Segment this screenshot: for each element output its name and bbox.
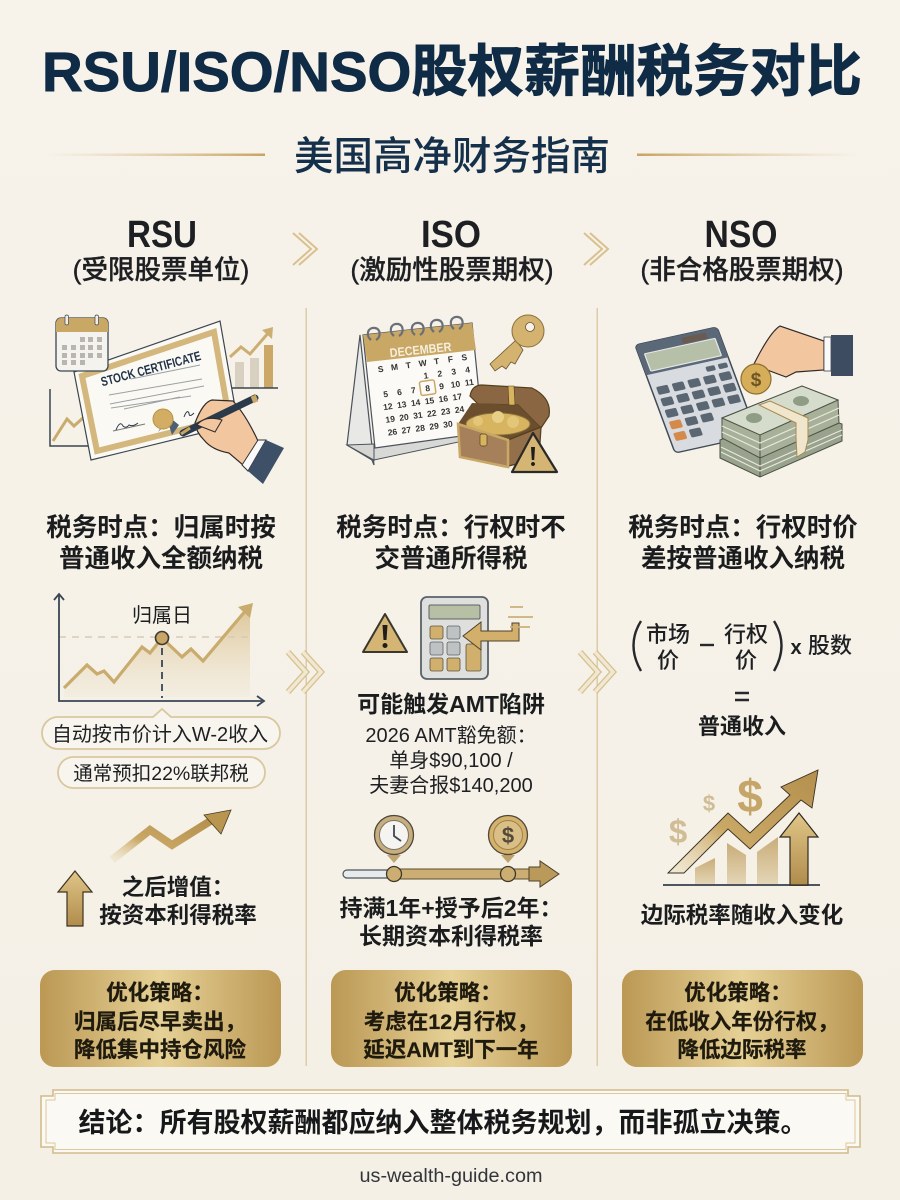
calendar dates: T xyxy=(433,356,441,366)
strategy box: NSO: 优化策略： xyxy=(684,981,792,1005)
desk calendar xyxy=(347,317,484,465)
calendar dates: 9 xyxy=(439,381,445,391)
strategy box: ISO xyxy=(331,970,572,1067)
column heading: ISO xyxy=(350,214,554,285)
title: RSU/ISO/NSO股权薪酬税务对比 xyxy=(42,40,862,103)
note: long-term capital gains: 长期资本利得税率 xyxy=(359,923,543,949)
pin: clock xyxy=(374,816,414,863)
calendar dates: 30 xyxy=(443,419,454,430)
strategy box: NSO: 降低边际税率 xyxy=(677,1038,807,1062)
pin: dollar: $ xyxy=(502,823,514,848)
calendar dates: W xyxy=(418,357,428,369)
calendar dates: 26 xyxy=(387,426,398,438)
chart icon: rising marginal rate xyxy=(663,770,820,885)
calendar dates: 11 xyxy=(464,377,475,388)
calendar dates: 24 xyxy=(454,404,465,415)
column heading: RSU xyxy=(73,214,249,285)
formula: spread = ordinary income: 普通收入 xyxy=(698,714,786,739)
calendar dates: 7 xyxy=(410,385,417,395)
tax timing: RSU xyxy=(46,514,276,573)
calendar dates: 13 xyxy=(396,399,407,410)
tax timing: NSO: 税务时点：行权时价 xyxy=(628,514,858,542)
calendar dates: T xyxy=(405,360,412,370)
calendar dates: 14 xyxy=(410,397,421,408)
calendar dates: 31 xyxy=(412,410,424,421)
calendar dates: 16 xyxy=(438,393,449,404)
strategy box: RSU: 归属后尽早卖出， xyxy=(74,1010,246,1034)
certificate xyxy=(74,321,238,460)
line chart: vesting date xyxy=(54,594,264,706)
callout: W-2 income xyxy=(42,709,280,749)
strategy box: ISO: 考虑在12月行权， xyxy=(364,1010,538,1034)
calendar dates: 29 xyxy=(429,420,440,432)
tax timing: NSO xyxy=(628,514,858,573)
note: capital gains: 之后增值： xyxy=(122,874,234,900)
strategy box: RSU: 降低集中持仓风险 xyxy=(74,1037,246,1062)
formula: spread = ordinary income: 行权 xyxy=(724,622,768,647)
calendar dates: 6 xyxy=(396,387,403,397)
calendar dates: S xyxy=(461,352,468,363)
formula: spread = ordinary income xyxy=(634,621,852,739)
calendar dates: 8 xyxy=(425,383,431,393)
note: capital gains xyxy=(99,874,257,928)
conclusion banner: 结论：所有股权薪酬都应纳入整体税务规划，而非孤立决策。 xyxy=(78,1108,808,1138)
calendar dates: 10 xyxy=(450,379,461,390)
calendar dates: 5 xyxy=(383,389,389,399)
hand with coin xyxy=(741,326,853,394)
AMT warning heading: 可能触发AMT陷阱 xyxy=(357,691,545,717)
tax timing: NSO: 差按普通收入纳税 xyxy=(641,545,845,573)
large chevron arrow: column 1 to 2 xyxy=(288,652,321,692)
calendar dates: 20 xyxy=(399,412,410,423)
AMT exemption amounts: 夫妻合报$140,200 xyxy=(369,774,533,797)
pin: dollar xyxy=(488,816,528,863)
icon: warning sign xyxy=(363,614,407,652)
chart icon: rising marginal rate: $ xyxy=(669,813,687,850)
callout: federal withholding xyxy=(58,757,265,788)
calculator xyxy=(635,327,757,453)
cash stacks xyxy=(720,386,842,477)
timeline: holding period xyxy=(343,816,559,887)
note: long-term capital gains: 持满1年+授予后2年： xyxy=(339,895,563,921)
calendar dates: 3 xyxy=(451,366,457,377)
column heading: ISO: ISO xyxy=(421,214,481,256)
line chart: vesting date: 归属日 xyxy=(132,604,192,627)
conclusion banner xyxy=(41,1090,860,1153)
illustration: calculator, coin and cash xyxy=(635,326,853,477)
illustration: stock certificate xyxy=(50,315,284,484)
hand with pen xyxy=(181,398,284,484)
chart icon: rising marginal rate: $ xyxy=(703,791,715,816)
tax timing: ISO: 税务时点：行权时不 xyxy=(336,514,566,542)
note: long-term capital gains xyxy=(339,895,563,949)
strategy box: ISO: 优化策略： xyxy=(394,981,502,1005)
formula: spread = ordinary income: x xyxy=(790,637,802,659)
callout: federal withholding: 通常预扣22%联邦税 xyxy=(73,763,249,785)
note: capital gains: 按资本利得税率 xyxy=(99,903,257,928)
footer source: us-wealth-guide.com xyxy=(360,1166,542,1187)
arrow: RSU to ISO xyxy=(293,233,317,265)
formula: spread = ordinary income: 价 xyxy=(735,648,757,673)
calendar dates: M xyxy=(390,362,399,373)
calendar dates: 19 xyxy=(385,414,396,425)
calendar dates: 27 xyxy=(401,424,412,436)
calendar dates: 12 xyxy=(382,401,394,412)
certificate: STOCK CERTIFICATE xyxy=(99,348,203,389)
column heading: NSO xyxy=(640,214,844,285)
arrow: ISO to NSO xyxy=(584,233,608,265)
warning sign xyxy=(512,433,557,472)
strategy box: NSO xyxy=(622,970,863,1067)
strategy box: NSO: 在低收入年份行权， xyxy=(645,1010,839,1034)
calendar dates: F xyxy=(447,354,454,365)
column heading: NSO: NSO xyxy=(704,214,778,256)
calendar dates: 4 xyxy=(464,364,471,375)
column heading: RSU: (受限股票单位) xyxy=(73,255,249,285)
tax timing: ISO: 交普通所得税 xyxy=(374,545,528,573)
background charts xyxy=(50,327,278,446)
calendar dates: 17 xyxy=(452,391,463,402)
AMT exemption amounts: 2026 AMT豁免额： xyxy=(365,724,537,747)
key xyxy=(490,315,544,371)
calendar dates: 22 xyxy=(426,408,437,419)
formula: spread = ordinary income: 价 xyxy=(657,648,679,673)
illustration: December calendar, key and chest xyxy=(347,315,557,472)
strategy box: ISO: 延迟AMT到下一年 xyxy=(363,1038,539,1062)
calendar dates: 23 xyxy=(440,406,451,417)
calendar dates: 28 xyxy=(415,422,426,434)
calendar dates xyxy=(377,351,480,438)
tax timing: RSU: 税务时点：归属时按 xyxy=(46,514,276,542)
tax timing: ISO xyxy=(336,514,566,573)
desk calendar: DECEMBER xyxy=(389,340,452,360)
formula: spread = ordinary income: 市场 xyxy=(646,622,690,647)
column heading: RSU: RSU xyxy=(127,214,197,256)
treasure chest xyxy=(458,385,549,467)
icon: rising arrow xyxy=(112,810,231,860)
strategy box: RSU xyxy=(40,970,281,1067)
AMT exemption amounts xyxy=(365,724,537,797)
strategy box: RSU: 优化策略： xyxy=(106,981,214,1005)
calendar xyxy=(56,315,108,371)
calendar dates: 2 xyxy=(437,368,443,379)
tax timing: RSU: 普通收入全额纳税 xyxy=(59,545,263,573)
calendar dates: 15 xyxy=(424,395,435,406)
callout: W-2 income: 自动按市价计入W-2收入 xyxy=(52,723,268,746)
chart icon: rising marginal rate: $ xyxy=(737,770,763,822)
hand with coin: $ xyxy=(751,370,762,391)
formula: spread = ordinary income: 股数 xyxy=(808,633,852,658)
AMT exemption amounts: 单身$90,100 / xyxy=(389,749,513,772)
icon: up arrow xyxy=(58,871,92,926)
calendar dates: S xyxy=(377,364,384,374)
column heading: ISO: (激励性股票期权) xyxy=(350,255,554,285)
subtitle with rules: 美国高净财务指南 xyxy=(294,135,610,179)
note: marginal rate: 边际税率随收入变化 xyxy=(641,902,843,928)
icon: calculator with arrow xyxy=(421,597,533,679)
large chevron arrow: column 2 to 3 xyxy=(580,652,613,692)
column heading: NSO: (非合格股票期权) xyxy=(640,255,844,285)
calendar dates: 1 xyxy=(423,370,429,381)
